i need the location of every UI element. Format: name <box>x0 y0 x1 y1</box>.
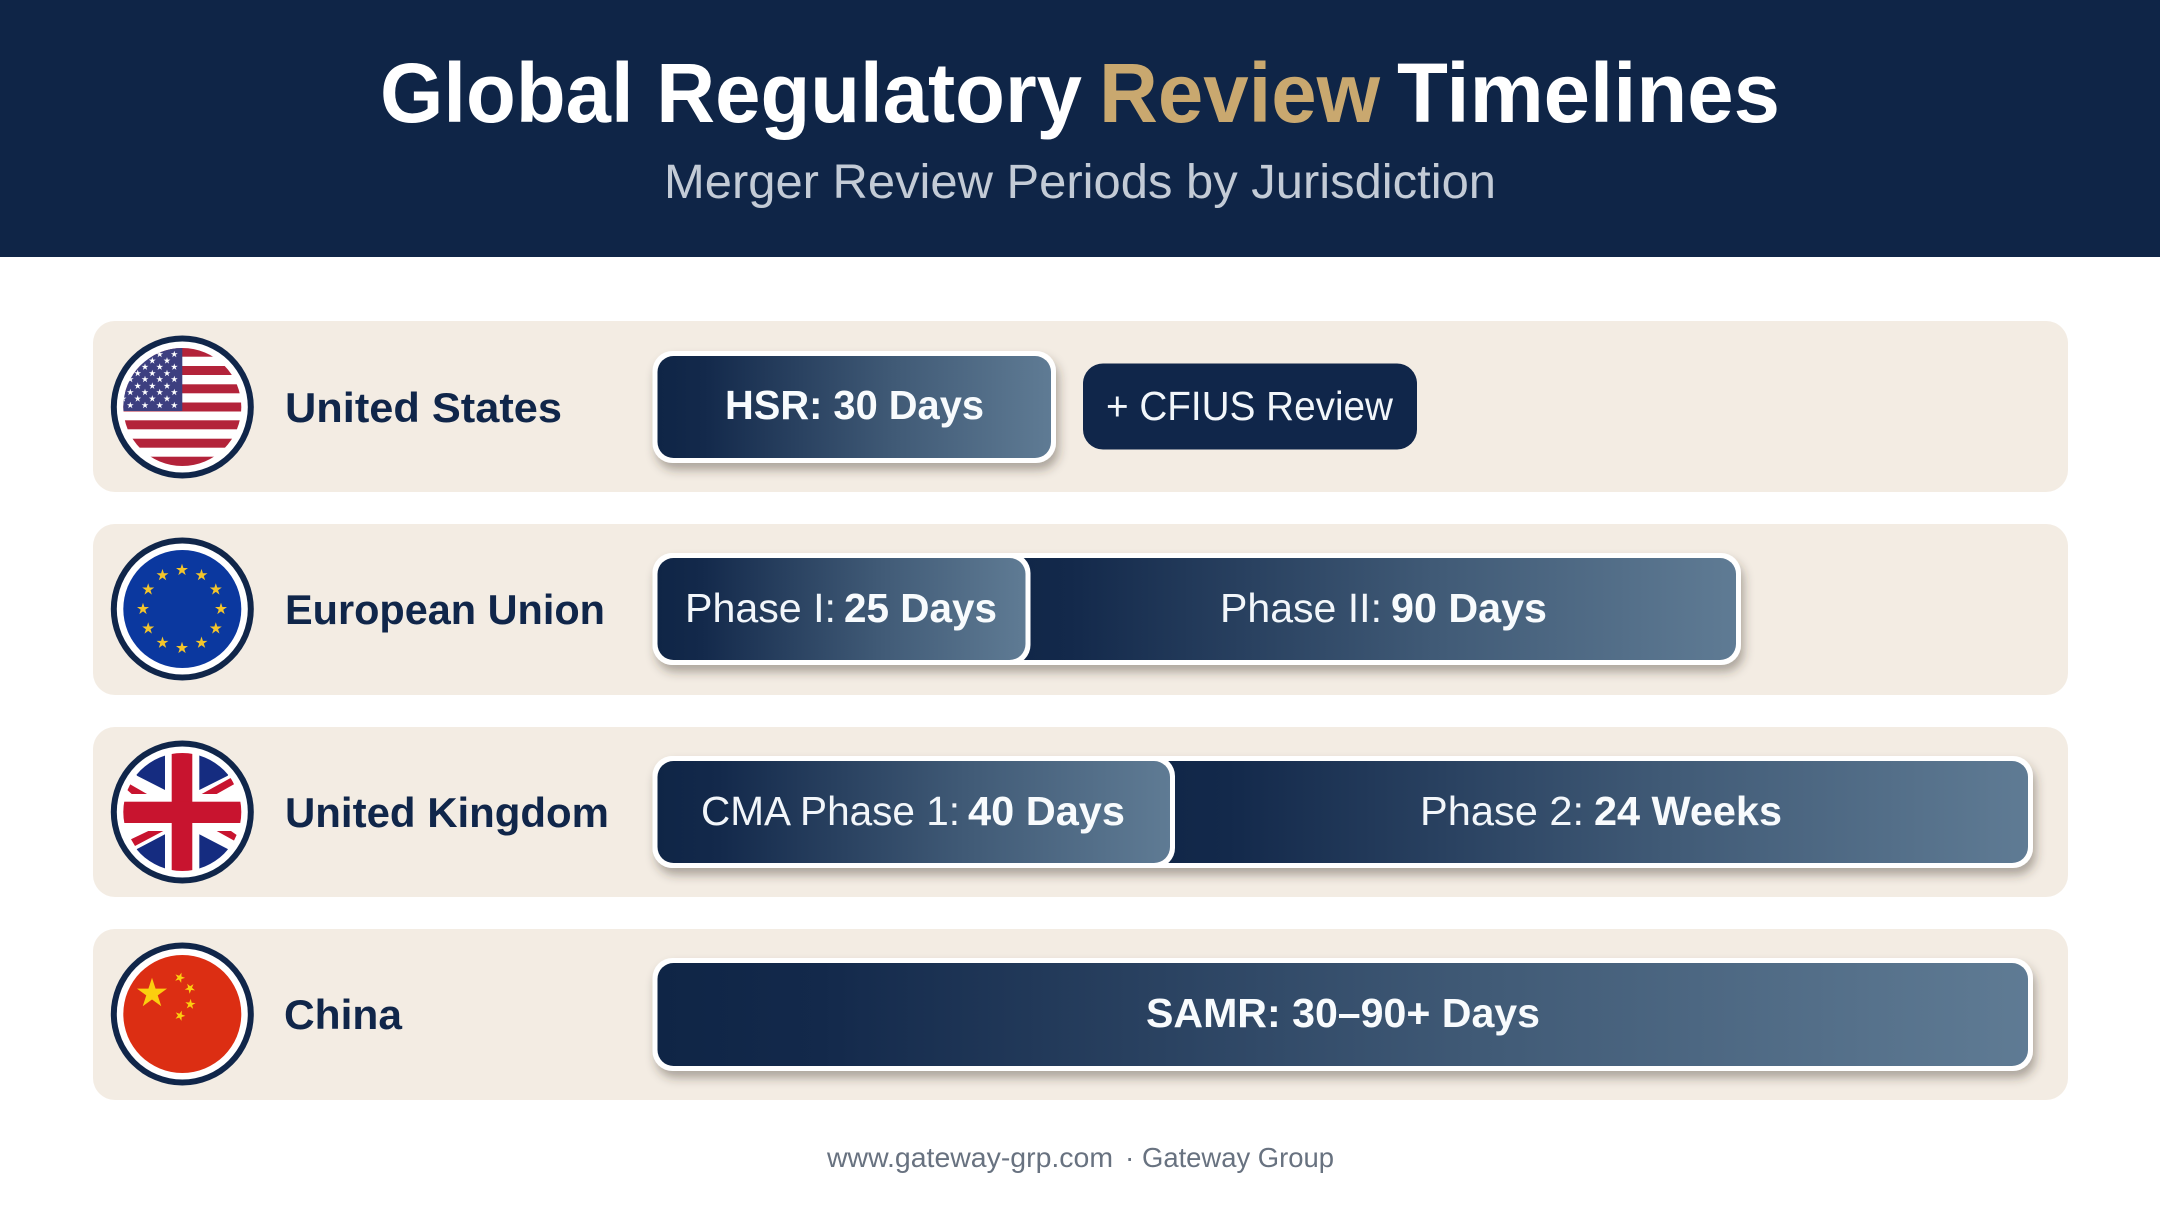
segment label: CMA Phase 1: 40 Days <box>968 788 1125 834</box>
footer: www.gateway-grp.com <box>826 1142 1113 1173</box>
segment label: Phase II: Phase II: <box>1220 585 1382 631</box>
subtitle: Merger Review Periods by Jurisdiction <box>664 156 1496 209</box>
footer: · <box>1125 1142 1134 1173</box>
title: Timelines <box>1397 46 1780 140</box>
title <box>380 46 1780 140</box>
icon: EU flag <box>111 538 254 680</box>
segment label: Phase II <box>1220 585 1547 631</box>
segment label: Phase I: Phase I: <box>685 585 836 631</box>
bar: HSR 30 days <box>652 351 1056 463</box>
segment label: Phase I <box>685 585 997 631</box>
segment label: CMA Phase 1 <box>701 788 1125 834</box>
footer <box>826 1142 1334 1173</box>
label: China: China <box>284 991 403 1038</box>
bar: UK phases <box>652 756 2033 868</box>
icon: UK flag <box>111 740 254 884</box>
bar: HSR 30 days: HSR: 30 Days <box>725 382 984 428</box>
segment label: Phase I: 25 Days <box>844 585 997 631</box>
panel: European Union <box>93 524 2068 695</box>
panel: United States <box>93 321 2068 492</box>
panel: United Kingdom <box>93 727 2068 897</box>
icon: China flag <box>111 942 254 1086</box>
segment label: Phase 2 <box>1420 788 1782 834</box>
badge: CFIUS review <box>1083 364 1417 450</box>
segment label: Phase II: 90 Days <box>1391 585 1547 631</box>
segment label: CMA Phase 1: CMA Phase 1: <box>701 788 960 834</box>
segment label: Phase 2: Phase 2: <box>1420 788 1584 834</box>
bar: SAMR: SAMR: 30–90+ Days <box>1146 990 1540 1036</box>
footer: Gateway Group <box>1142 1142 1334 1173</box>
header band <box>0 0 2160 257</box>
label: United States: United States <box>285 384 562 431</box>
bar: EU phases <box>652 553 1741 665</box>
bar: SAMR <box>652 958 2033 1071</box>
title: Review <box>1099 46 1381 140</box>
badge: CFIUS review: + CFIUS Review <box>1106 383 1393 429</box>
label: European Union: European Union <box>285 586 605 633</box>
segment label: Phase 2: 24 Weeks <box>1594 788 1782 834</box>
panel: China <box>93 929 2068 1100</box>
title: Global Regulatory <box>380 46 1082 140</box>
label: United Kingdom: United Kingdom <box>285 789 609 836</box>
icon: US flag <box>111 336 254 478</box>
